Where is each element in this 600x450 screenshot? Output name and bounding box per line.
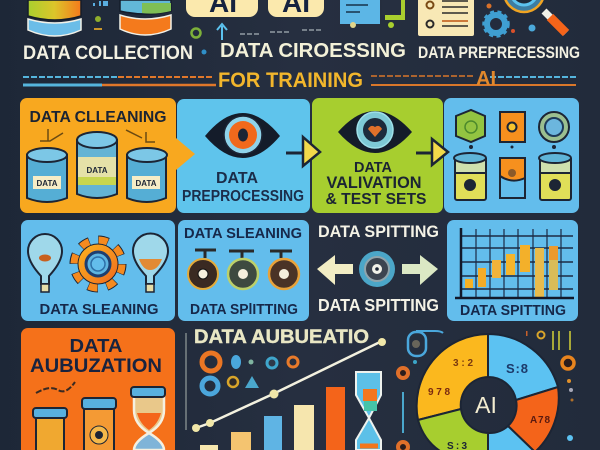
icon: magnifying glass <box>504 0 566 33</box>
icon: split arrows <box>317 251 438 287</box>
icon: database two <box>120 0 171 35</box>
icon: checklist card <box>418 0 474 36</box>
icon: eye <box>205 113 280 158</box>
text: DATA <box>354 159 392 176</box>
icon: ring three <box>269 251 299 289</box>
icon: orange card <box>500 158 525 198</box>
icon: gear small <box>484 4 536 36</box>
arrow: eye pointer <box>286 152 310 154</box>
icon: dna hourglass <box>356 372 381 450</box>
panel: bar chart data spitting <box>447 220 578 321</box>
arrow: into validation <box>303 137 320 166</box>
icon: ticks <box>40 129 155 142</box>
divider: right dashed lines <box>371 76 576 85</box>
center label: AI <box>475 392 497 418</box>
icon: jar middle <box>82 398 116 450</box>
icon: right bulb <box>133 234 168 292</box>
text: PREPROCESSING <box>182 188 304 205</box>
panel: data augmentation <box>21 328 175 450</box>
icon: gear <box>74 240 122 288</box>
line chart <box>192 338 386 432</box>
panel: data cleaning <box>20 98 176 213</box>
icon: small drop <box>202 50 206 54</box>
pie chart <box>417 334 559 450</box>
icon: cylinder right <box>127 148 167 202</box>
panel: data preprocessing <box>176 99 310 213</box>
icon: up arrow <box>217 24 227 40</box>
icon: ring <box>192 28 200 38</box>
icon: tiny connector marks <box>240 30 322 34</box>
text: DATA SLEANING <box>184 225 302 242</box>
text: VALIVATION <box>326 174 422 192</box>
panel: top header strip <box>28 0 566 40</box>
icon: cylinder left <box>27 148 67 202</box>
heading: data spitting top: DATA SPITTING <box>318 222 439 241</box>
icon: side connector rings <box>398 331 443 450</box>
label: S:8 <box>506 361 528 376</box>
heading: for training: FOR TRAINING <box>218 69 363 92</box>
heading: DATA AUBUEATIO <box>194 327 369 348</box>
label: A78 <box>530 415 550 426</box>
text: DATA <box>70 336 122 356</box>
text: DATA <box>216 170 258 187</box>
divider: left dashed lines <box>23 77 216 85</box>
heading: data spitting bottom: DATA SPITTING <box>318 295 439 315</box>
label: 3:2 <box>453 358 473 369</box>
icon: cylinder right: DATA <box>135 179 157 188</box>
panel: data augmentation chart area <box>186 327 443 450</box>
icon: eye <box>338 111 412 153</box>
icon: top right decorations <box>526 331 574 441</box>
divider axis <box>185 333 187 430</box>
icon: AI badge one <box>186 0 258 18</box>
icon: jar left <box>454 153 486 200</box>
heading: data processing: DATA CIROESSING <box>220 40 406 62</box>
text: DATA SLEANING <box>40 301 158 318</box>
heading: data collection: DATA COLLECTION <box>23 42 193 64</box>
bar chart <box>455 228 574 298</box>
panel: data splitting rings <box>178 220 309 321</box>
icon: ring two <box>228 251 258 289</box>
panel: data validation <box>303 98 443 213</box>
arrow: into test sets <box>416 139 448 165</box>
icon: squiggle <box>36 382 75 393</box>
panel: data sleaning <box>21 220 175 321</box>
label: AI: AI <box>476 68 496 90</box>
icon: AI badge two <box>268 0 324 18</box>
icon: blue ring <box>539 112 569 149</box>
arrow: from cleaning <box>176 138 195 170</box>
icon: cylinder middle <box>77 132 117 198</box>
icon: small dots <box>93 1 108 30</box>
icon: left bulb <box>28 234 62 292</box>
text: DATA SPlITTING <box>190 301 298 318</box>
icon: clipboard folder <box>340 0 405 28</box>
icon: orange square <box>500 112 525 148</box>
heading: DATA CLLEANING <box>30 109 166 126</box>
bar chart <box>200 387 345 450</box>
icon: hourglass <box>131 387 165 450</box>
text: & TEST SETS <box>326 191 427 208</box>
icon: jar left <box>33 408 67 450</box>
label: 978 <box>428 387 450 398</box>
icon: database one <box>28 0 81 36</box>
text: DATA SPITTING <box>460 303 566 319</box>
icon: cylinder middle: DATA <box>86 166 108 175</box>
icon: ring row <box>202 353 298 394</box>
panel: test sets icons <box>416 98 579 213</box>
icon: ring one <box>188 250 218 289</box>
text: AUBUZATION <box>30 355 162 377</box>
icon: jar right <box>539 153 571 200</box>
icon: green shield <box>456 110 485 149</box>
icon: cylinder left: DATA <box>36 179 58 188</box>
